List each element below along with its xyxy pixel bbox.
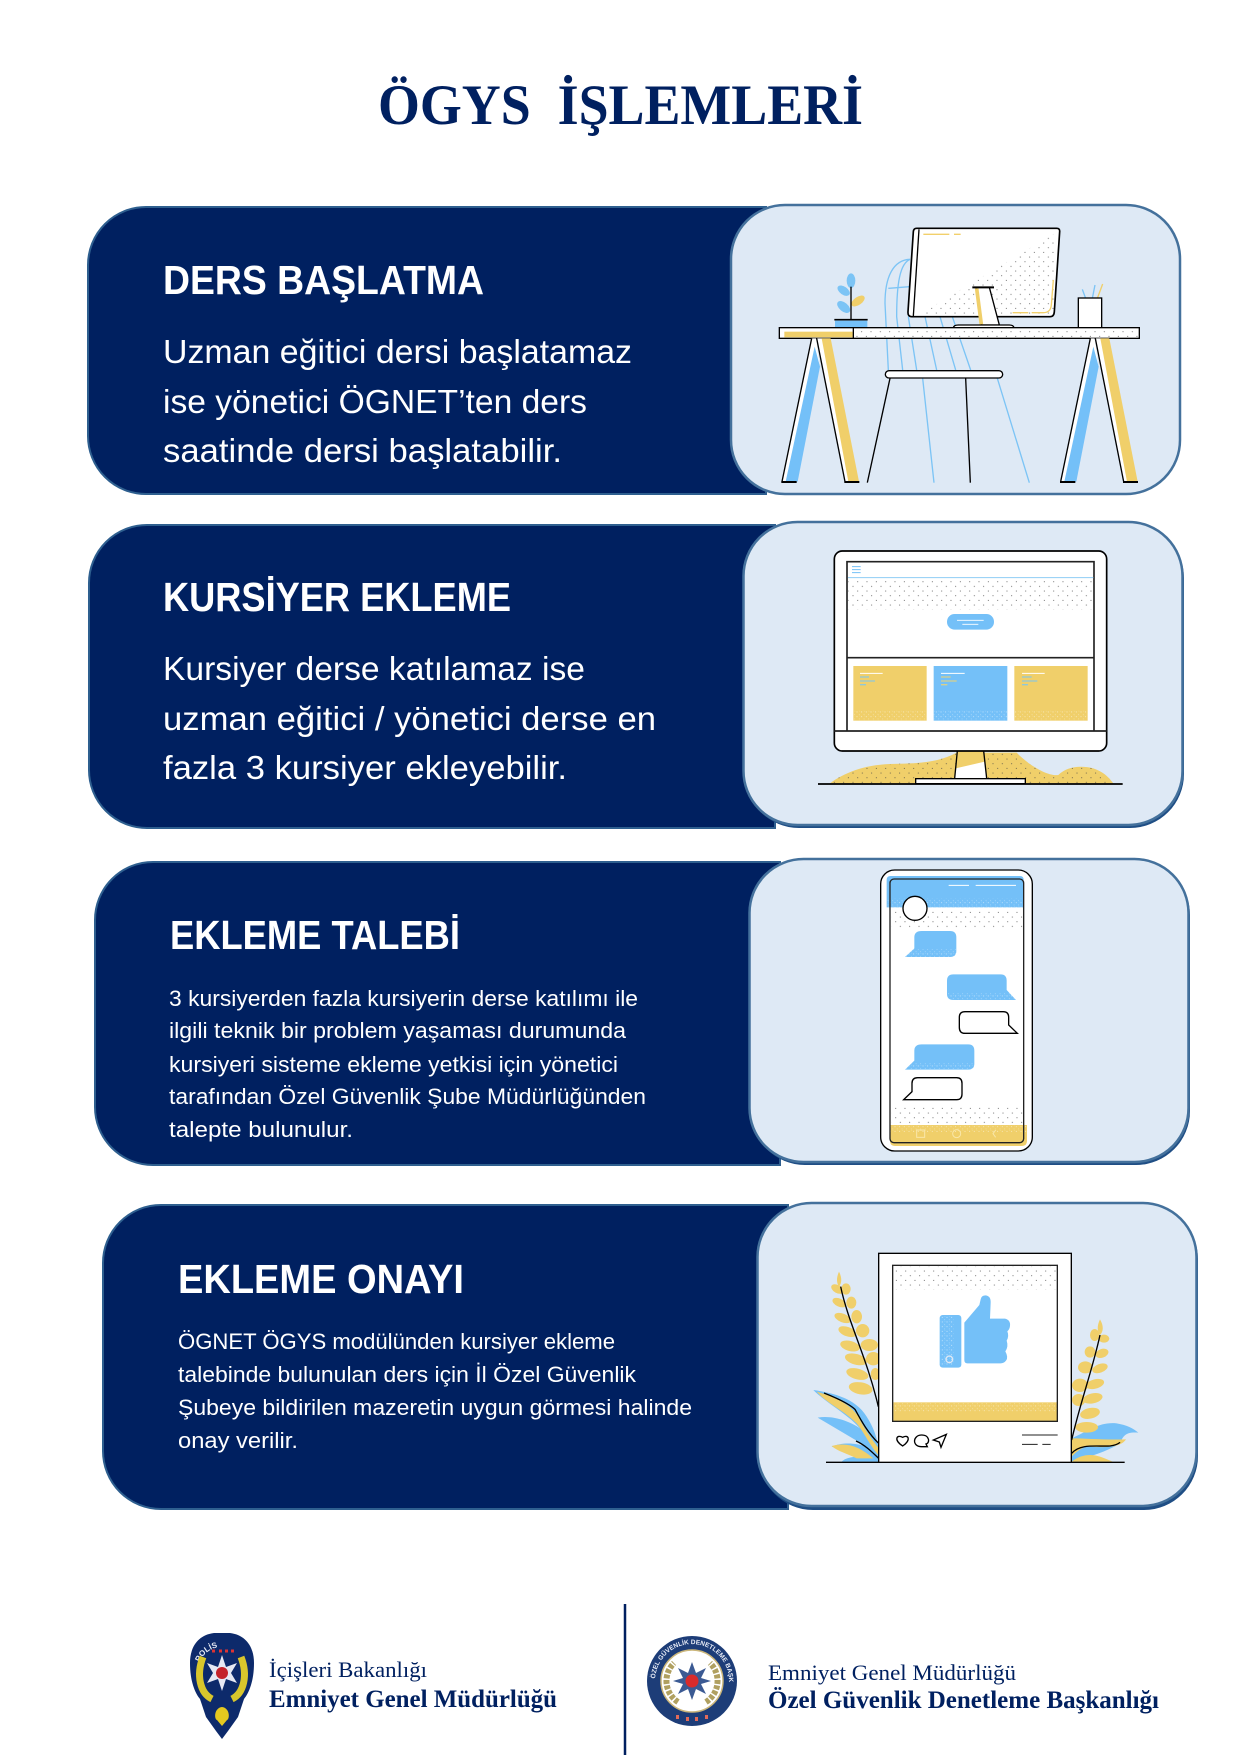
logo: Emniyet Genel Müdürlüğü badge: [190, 1633, 254, 1739]
text: İçişleri Bakanlığı / Emniyet Genel Müdürlüğü: [269, 1657, 557, 1713]
panel: thumbs up illustration background: [758, 1203, 1196, 1506]
panel: ekleme onayı: [103, 1203, 1198, 1510]
text: ekleme talebi body: kursiyeri sisteme ekleme yetkisi için yönetici: [169, 1052, 618, 1077]
text: ders başlatma body: Uzman eğitici dersi başlatamaz: [163, 333, 632, 370]
icon: phone with chat: [881, 870, 1032, 1151]
logo: Özel Güvenlik Denetleme Başkanlığı badge: ÖZEL GÜVENLİK DENETLEME BAŞKANLIĞI: [650, 1640, 734, 1682]
panel: ders başlatma: [88, 205, 1180, 494]
text: Emniyet Genel Müdürlüğü / Özel Güvenlik Denetleme Başkanlığı: Özel Güvenlik Denetleme Başkanlığı: [768, 1687, 1159, 1714]
logo: Emniyet Genel Müdürlüğü badge: POLİS: [194, 1642, 217, 1661]
heading: ekleme talebi: EKLEME TALEBİ: [170, 912, 460, 958]
title: ÖGYS İŞLEMLERİ: [378, 74, 863, 137]
icon: desk with monitor: [779, 228, 1139, 483]
logo: Özel Güvenlik Denetleme Başkanlığı badge: [647, 1636, 737, 1726]
divider: [624, 1604, 626, 1755]
text: ekleme onayı body: [178, 1329, 692, 1453]
panel shadow: [745, 524, 1184, 828]
text: İçişleri Bakanlığı / Emniyet Genel Müdürlüğü: Emniyet Genel Müdürlüğü: [269, 1686, 557, 1713]
panel: desk illustration background: [731, 205, 1180, 494]
text: ders başlatma body: [163, 333, 632, 469]
text: kursiyer ekleme body: uzman eğitici / yönetici derse en: [163, 700, 656, 737]
text: ders başlatma body: ise yönetici ÖGNET’ten ders: [163, 383, 587, 420]
panel: kursiyer ekleme: [89, 522, 1184, 828]
text: ekleme talebi body: tarafından Özel Güvenlik Şube Müdürlüğünden: [169, 1084, 646, 1109]
text: ekleme talebi body: talepte bulunulur.: [169, 1117, 353, 1142]
panel: monitor illustration background: [744, 522, 1182, 825]
text: ekleme onayı body: talebinde bulunulan ders için İl Özel Güvenlik: [178, 1362, 637, 1387]
heading: ekleme onayı: EKLEME ONAYI: [178, 1256, 464, 1302]
panel: phone illustration background: [750, 859, 1188, 1162]
heading: ders başlatma: DERS BAŞLATMA: [163, 257, 484, 303]
text: ekleme talebi body: ilgili teknik bir problem yaşaması durumunda: [169, 1018, 627, 1043]
text: ekleme onayı body: onay verilir.: [178, 1428, 298, 1453]
text: ekleme onayı body: ÖGNET ÖGYS modülünden kursiyer ekleme: [178, 1329, 615, 1354]
icon: social post with thumbs up and plants: [813, 1253, 1138, 1462]
panel shadow: [751, 861, 1190, 1165]
panel: ekleme talebi: [95, 859, 1190, 1165]
text: Emniyet Genel Müdürlüğü / Özel Güvenlik Denetleme Başkanlığı: [768, 1660, 1159, 1714]
text: ekleme talebi body: 3 kursiyerden fazla kursiyerin derse katılımı ile: [169, 986, 638, 1011]
text: kursiyer ekleme body: Kursiyer derse katılamaz ise: [163, 650, 585, 687]
text: ders başlatma body: saatinde dersi başlatabilir.: [163, 432, 562, 469]
text: ekleme onayı body: Şubeye bildirilen mazeretin uygun görmesi halinde: [178, 1395, 692, 1420]
text: kursiyer ekleme body: fazla 3 kursiyer ekleyebilir.: [163, 749, 567, 786]
heading: kursiyer ekleme: KURSİYER EKLEME: [163, 574, 511, 620]
icon: monitor with web page: [818, 551, 1123, 784]
text: kursiyer ekleme body: [163, 650, 656, 786]
text: ekleme talebi body: [169, 986, 646, 1142]
panel shadow: [759, 1205, 1198, 1510]
text: Emniyet Genel Müdürlüğü / Özel Güvenlik Denetleme Başkanlığı: Emniyet Genel Müdürlüğü: [768, 1660, 1016, 1685]
text: İçişleri Bakanlığı / Emniyet Genel Müdürlüğü: İçişleri Bakanlığı: [269, 1657, 427, 1682]
